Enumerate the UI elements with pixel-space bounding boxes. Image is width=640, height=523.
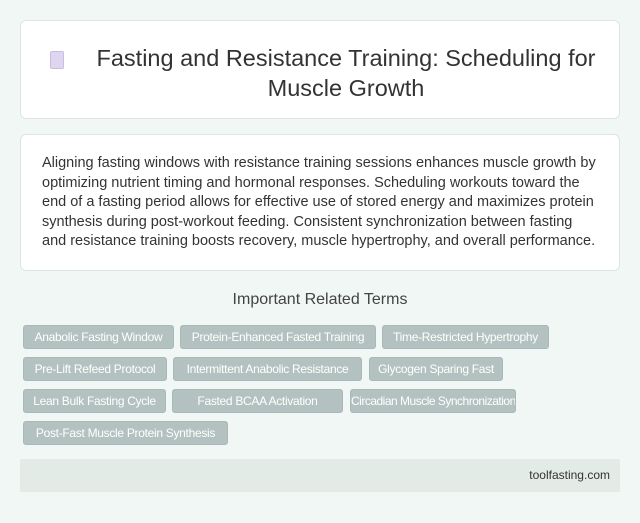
footer bbox=[20, 459, 620, 492]
icon: document bbox=[50, 51, 64, 69]
tags: Post-Fast Muscle Protein Synthesis bbox=[36, 426, 215, 440]
footer source: toolfasting.com bbox=[529, 468, 610, 482]
description text: Aligning fasting windows with resistance training sessions enhances muscle growth by bbox=[42, 155, 596, 171]
description card bbox=[20, 134, 620, 271]
tags: Protein-Enhanced Fasted Training bbox=[192, 330, 364, 344]
tags: Fasted BCAA Activation bbox=[197, 394, 318, 408]
tags: Intermittent Anabolic Resistance bbox=[187, 362, 348, 376]
tags: Pre-Lift Refeed Protocol bbox=[35, 362, 155, 376]
description text: optimizing nutrient timing and hormonal responses. Scheduling workouts toward the bbox=[42, 175, 580, 191]
title: Fasting and Resistance Training: Scheduling for Muscle Growth bbox=[96, 45, 596, 101]
description text bbox=[42, 155, 596, 249]
tags: Lean Bulk Fasting Cycle bbox=[33, 394, 156, 408]
description text: and resistance training boosts recovery, muscle hypertrophy, and overall performance. bbox=[42, 233, 595, 249]
description text: synthesis during post-workout feeding. Consistent synchronization between fasting bbox=[42, 214, 572, 230]
tags: Glycogen Sparing Fast bbox=[378, 362, 494, 376]
description text: end of a fasting period allows for effective use of stored energy and maximizes protein bbox=[42, 194, 594, 210]
tags: Time-Restricted Hypertrophy bbox=[393, 330, 538, 344]
related terms heading: Important Related Terms bbox=[233, 291, 407, 308]
tags: Anabolic Fasting Window bbox=[35, 330, 162, 344]
header card bbox=[20, 20, 620, 119]
tags: Circadian Muscle Synchronization bbox=[351, 394, 516, 408]
